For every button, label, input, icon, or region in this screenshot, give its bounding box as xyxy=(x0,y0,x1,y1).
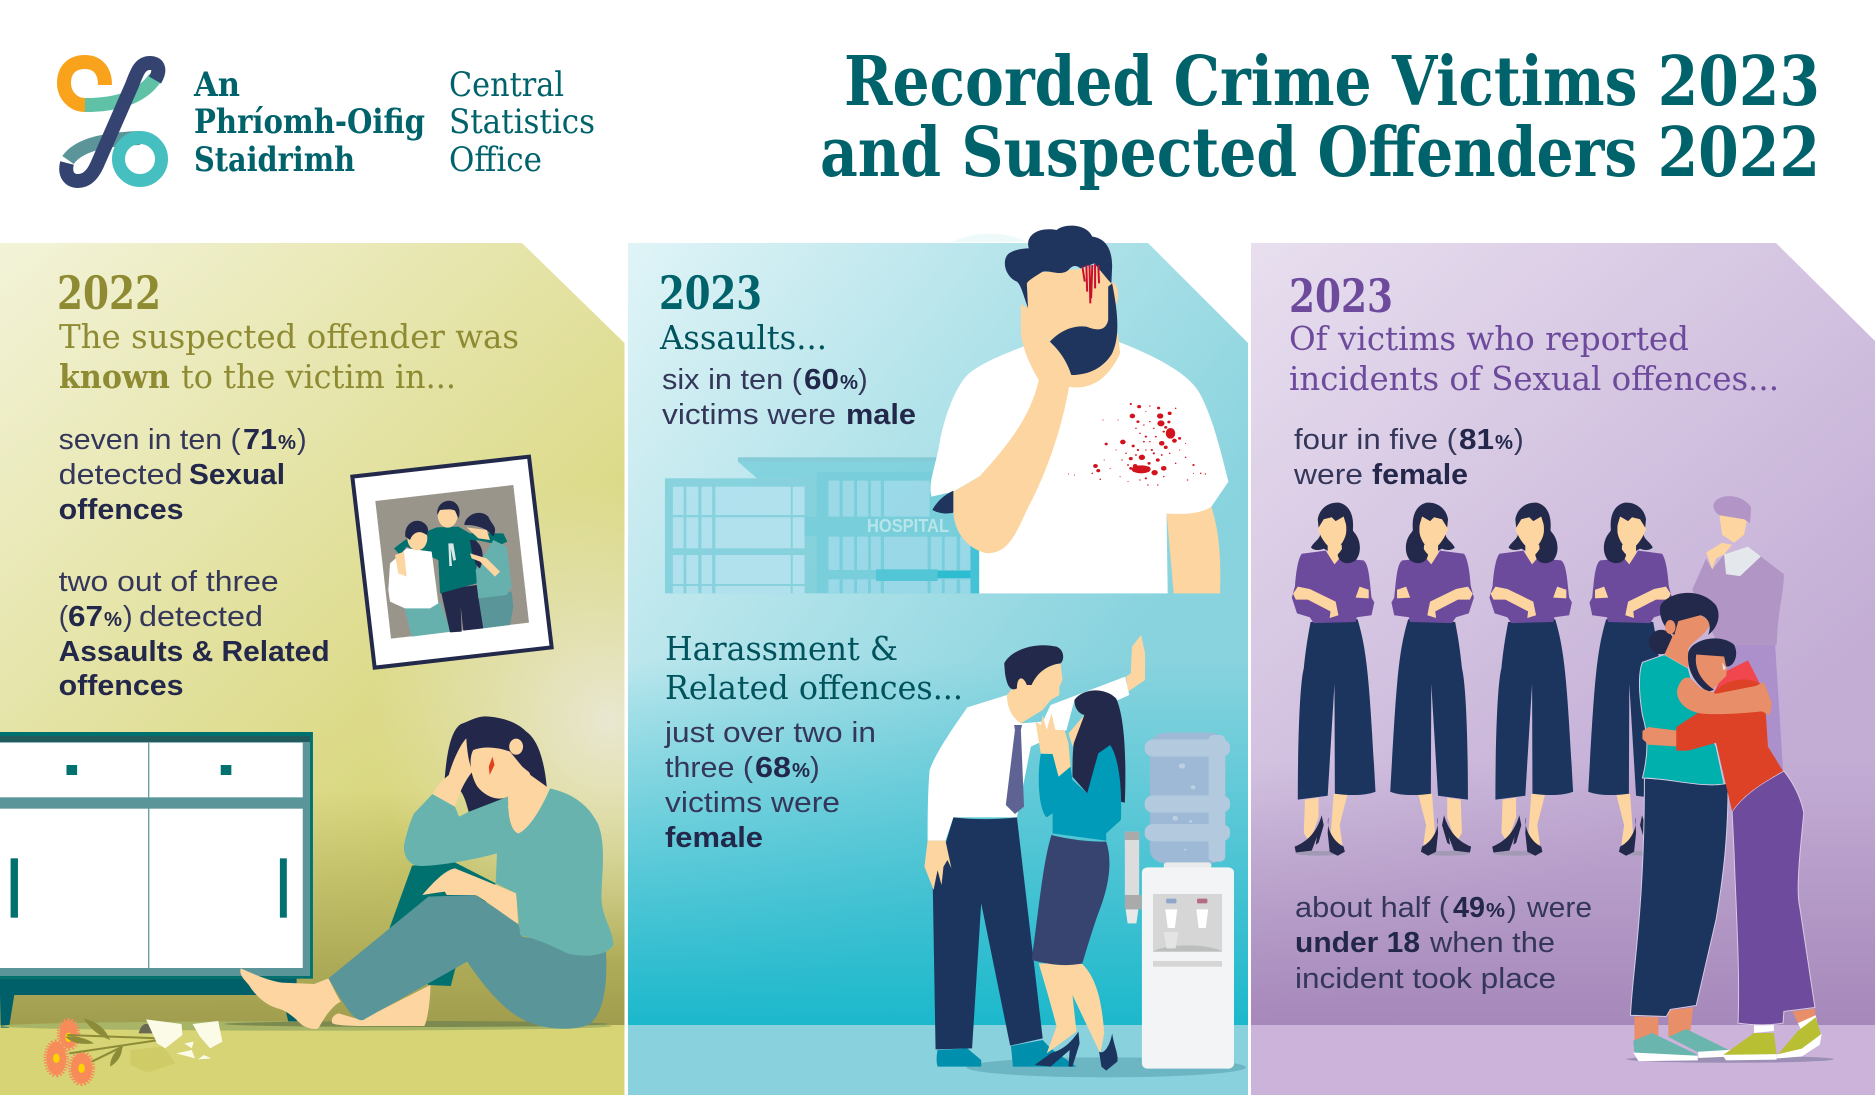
heading sexual offences: 2023 xyxy=(1289,269,1393,323)
stat: 49% under 18: when the xyxy=(1429,927,1555,959)
heading sexual offences xyxy=(1289,269,1779,398)
stat: 49% under 18: % xyxy=(1486,900,1505,922)
stat: harassment 68% female xyxy=(664,717,876,854)
stat: sexual offences 71%: seven in ten ( xyxy=(59,424,241,456)
stat: 49% under 18: under 18 xyxy=(1295,927,1420,959)
stat: assaults 60% male: victims were xyxy=(662,399,836,431)
illustration: sideboard cabinet xyxy=(0,732,313,1028)
illustration: mother hugging crying girl xyxy=(1626,593,1834,1063)
stat: assaults 67%: % xyxy=(104,609,122,631)
stat: assaults 60% male: 60 xyxy=(804,364,839,396)
logo Irish name xyxy=(193,65,425,180)
stat: assaults 60% male: six in ten ( xyxy=(662,364,802,396)
illustration: four women out of five xyxy=(1292,503,1672,856)
stat: harassment 68% female: just over two in xyxy=(664,717,876,749)
heading assaults xyxy=(659,266,827,357)
heading sexual offences: incidents of Sexual offences... xyxy=(1289,359,1779,398)
stat: 81% female: female xyxy=(1372,459,1468,491)
stat: assaults 67%: 67 xyxy=(68,601,103,633)
stat: harassment 68% female: % xyxy=(792,760,810,782)
illustration: fallen flowers and broken vase xyxy=(47,1018,222,1084)
stat: 81% female xyxy=(1293,424,1524,491)
logo mark xyxy=(64,62,162,181)
logo Irish name: An xyxy=(193,65,240,105)
logo English name xyxy=(449,65,595,180)
heading 2022: known xyxy=(59,357,170,396)
floor shadow xyxy=(0,1021,612,1031)
logo English name: Statistics xyxy=(449,102,595,142)
icon: framed family photo xyxy=(352,457,552,668)
stat: 81% female: four in five ( xyxy=(1294,424,1457,456)
stat: sexual offences 71% xyxy=(59,424,307,526)
stat: sexual offences 71%: % xyxy=(278,432,296,454)
stat: assaults 67% xyxy=(59,566,330,702)
stat: assaults 67%: detected xyxy=(139,601,263,633)
stat: assaults 60% male: male xyxy=(846,399,916,431)
heading 2022 xyxy=(57,266,519,396)
illustration: injured man xyxy=(931,226,1228,593)
stat: assaults 67%: offences xyxy=(59,670,184,702)
heading harassment: Related offences... xyxy=(665,668,963,707)
heading harassment: Harassment & xyxy=(665,629,898,668)
stat: 81% female: % xyxy=(1495,432,1513,454)
stat: assaults 67%: ( xyxy=(59,601,69,633)
panel background xyxy=(0,243,624,1095)
stat: harassment 68% female: victims were xyxy=(665,787,840,819)
panel background xyxy=(1251,243,1875,1095)
stat: harassment 68% female: ) xyxy=(810,752,820,784)
heading 2022: The suspected offender was xyxy=(59,317,519,356)
heading sexual offences: Of victims who reported xyxy=(1289,319,1689,358)
stat: sexual offences 71%: Sexual xyxy=(189,459,285,491)
title xyxy=(820,42,1820,193)
panel: sexual offences 2023 xyxy=(1251,243,1875,1095)
stat: assaults 67%: Assaults & Related xyxy=(59,636,330,668)
heading assaults: Assaults... xyxy=(659,318,827,357)
heading 2022: to the victim in... xyxy=(181,357,456,396)
stat: sexual offences 71%: ) xyxy=(297,424,307,456)
illustration: water cooler xyxy=(1125,733,1234,1069)
heading 2022: 2022 xyxy=(57,266,161,320)
logo Irish name: Staidrimh xyxy=(194,140,355,180)
stat: 49% under 18: were xyxy=(1526,892,1592,924)
panel: suspected offender 2022 xyxy=(0,243,624,1095)
heading assaults: 2023 xyxy=(659,266,762,320)
stat: 49% under 18: incident took place xyxy=(1295,963,1556,995)
stat: 81% female: ) xyxy=(1514,424,1524,456)
stat: sexual offences 71%: offences xyxy=(59,494,184,526)
stat: sexual offences 71%: detected xyxy=(59,459,183,491)
stat: 81% female: 81 xyxy=(1459,424,1494,456)
panel: assaults and harassment 2023 xyxy=(628,226,1248,1095)
stat: 49% under 18: about half ( xyxy=(1295,892,1449,924)
hospital sign: HOSPITAL xyxy=(867,516,949,536)
stat: 81% female: were xyxy=(1293,459,1363,491)
panel background xyxy=(628,243,1248,1095)
stat: assaults 67%: ) xyxy=(123,601,133,633)
stat: harassment 68% female: three ( xyxy=(665,752,753,784)
logo Irish name: Phríomh-Oifig xyxy=(194,102,425,142)
stat: harassment 68% female: 68 xyxy=(755,752,791,784)
stat: assaults 60% male: ) xyxy=(858,364,868,396)
stat: assaults 60% male xyxy=(662,364,916,431)
logo English name: Office xyxy=(449,140,542,180)
stat: 49% under 18: ) xyxy=(1507,892,1517,924)
stat: sexual offences 71%: 71 xyxy=(243,424,277,456)
header logo xyxy=(64,62,595,181)
heading harassment xyxy=(665,629,963,707)
stat: assaults 60% male: % xyxy=(840,372,858,394)
stat: harassment 68% female: female xyxy=(665,822,763,854)
stat: assaults 67%: two out of three xyxy=(59,566,279,598)
illustration: faded man, fifth figure xyxy=(1692,496,1784,770)
illustration: distressed woman seated xyxy=(240,716,613,1029)
logo English name: Central xyxy=(449,65,564,105)
illustration: hospital building xyxy=(665,457,979,593)
stat: 49% under 18 xyxy=(1295,892,1592,995)
illustration: office harassment xyxy=(924,635,1246,1077)
stat: 49% under 18: 49 xyxy=(1453,892,1485,924)
